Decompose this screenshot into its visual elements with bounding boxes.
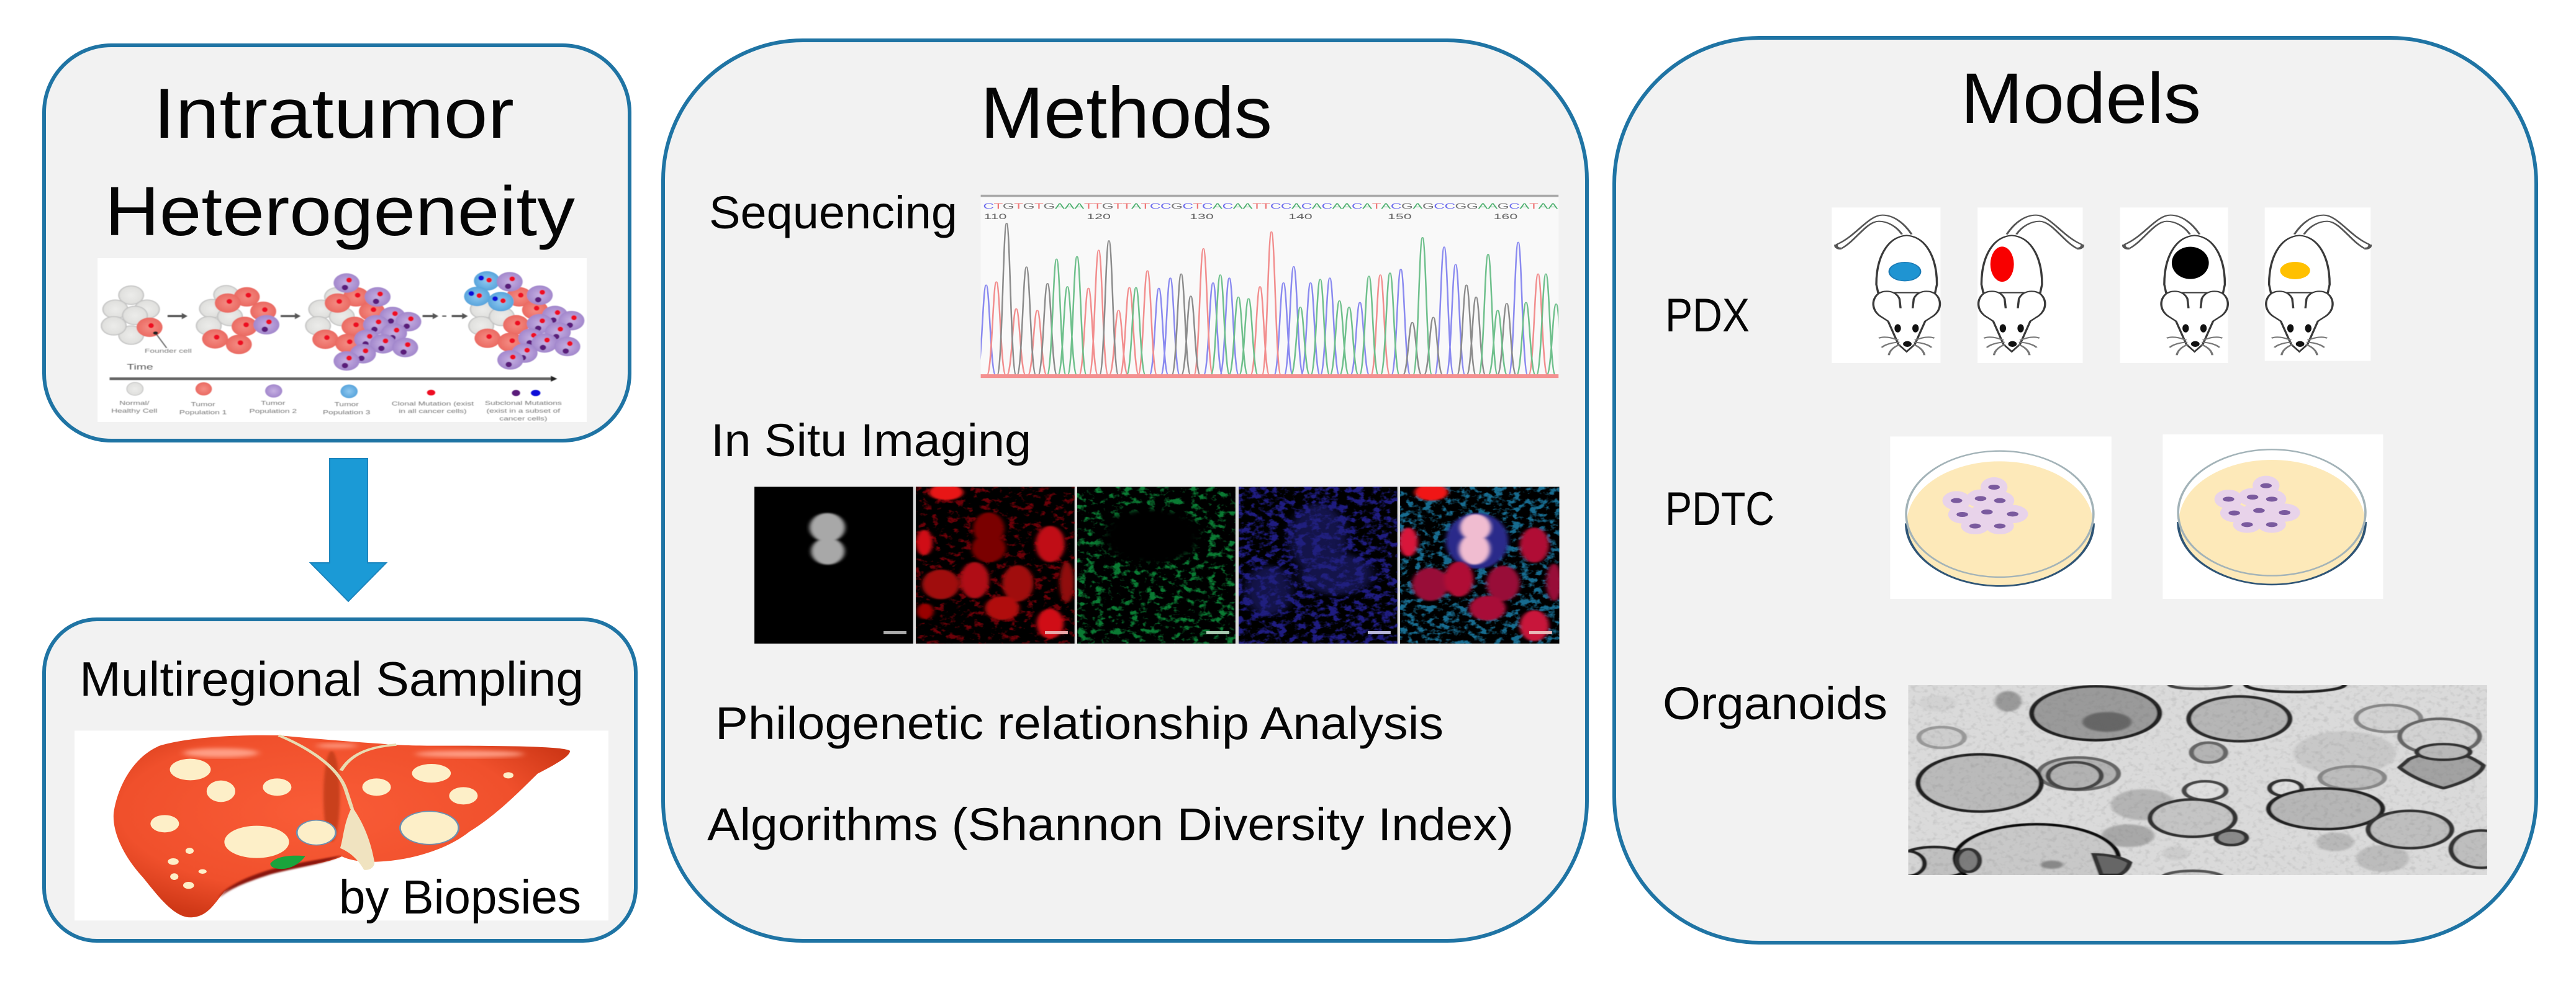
- stage 1 cells: [101, 285, 192, 354]
- label: Philogenetic relationship Analysis: Philogenetic relationship Analysis: [715, 698, 1444, 749]
- label: PDTC: PDTC: [1665, 483, 1774, 536]
- petri dish 1: [1890, 436, 2112, 599]
- petri dish 2: [2162, 434, 2383, 599]
- mouse illustrations: [1832, 207, 2370, 363]
- petri dishes: [1890, 434, 2383, 599]
- micrograph: green channel: [1077, 487, 1236, 644]
- legend: Population 3: [323, 410, 370, 416]
- arrow: down to sampling: [310, 459, 386, 601]
- stage 1 cells: Founder cell: [145, 348, 192, 354]
- mouse: blue tumor: [1832, 207, 1940, 363]
- legend: cancer cells): [499, 416, 548, 422]
- image: organoid micrograph: [1908, 685, 2487, 875]
- panel: methods: [663, 40, 1587, 941]
- diagram: clonal evolution over time: [97, 258, 587, 422]
- stage 2 cells: [196, 285, 279, 354]
- position numbers: 130: [1190, 212, 1214, 221]
- micrograph: blue channel: [1239, 487, 1398, 644]
- position numbers: 160: [1494, 212, 1517, 221]
- heading: Multiregional Sampling: Multiregional Sampling: [79, 652, 584, 706]
- liver body: [114, 735, 570, 917]
- position numbers: 110: [983, 212, 1006, 221]
- label: Sequencing: Sequencing: [709, 187, 957, 238]
- legend: Normal/: [119, 400, 150, 406]
- legend: in all cancer cells): [399, 408, 467, 415]
- mouse: yellow tumor: [2265, 207, 2370, 361]
- gallbladder: [270, 856, 305, 869]
- panel: multiregional sampling: [44, 619, 636, 941]
- arrow: stage 1 to 2: [168, 313, 188, 319]
- legend: Tumor: [191, 402, 215, 408]
- arrow: stage 3 to 4: [423, 313, 468, 319]
- heading: Methods: Methods: [980, 72, 1272, 153]
- label: Algorithms: Algorithms (Shannon Diversity Index): [707, 799, 1514, 850]
- label: In Situ Imaging: In Situ Imaging: [711, 415, 1031, 466]
- legend: Healthy Cell: [111, 408, 157, 414]
- position numbers: 140: [1288, 212, 1313, 221]
- position numbers: 120: [1087, 212, 1111, 221]
- label: PDX: PDX: [1665, 289, 1750, 342]
- sequence letters: CTGTGTGAAATTGTTATCCGCTCACAATTCCACACAACATACGAGCCGGAAGCATAA: [983, 202, 1558, 211]
- legend: Clonal Mutation (exist: [392, 401, 474, 407]
- label: by Biopsies: by Biopsies: [339, 871, 581, 924]
- image strip: fluorescence microscopy: [754, 484, 1562, 644]
- time axis: Time: [127, 362, 153, 371]
- time axis: [110, 362, 557, 382]
- micrograph: merged channels: [1399, 484, 1562, 644]
- lesions: [150, 759, 513, 889]
- position numbers: 150: [1388, 212, 1412, 221]
- heading: Intratumor Heterogeneity: Heterogeneity: [105, 173, 575, 250]
- panel: models: [1614, 38, 2536, 943]
- legend: (exist in a subset of: [487, 408, 561, 414]
- legend: Population 1: [179, 410, 227, 416]
- legend: Tumor: [335, 402, 359, 408]
- position numbers: [983, 212, 1517, 221]
- stage 3 cells: [305, 273, 422, 370]
- label: Organoids: Organoids: [1663, 678, 1887, 729]
- falciform ligament: [279, 735, 396, 870]
- heading: Intratumor Heterogeneity: [105, 74, 575, 250]
- panel: intratumor heterogeneity: [44, 45, 630, 441]
- arrow: stage 2 to 3: [281, 313, 301, 319]
- heading: Models: Models: [1961, 59, 2201, 138]
- mouse: black tumor: [2120, 207, 2228, 363]
- chart: sequencing chromatogram: [977, 195, 1566, 379]
- trace peaks: [977, 223, 1566, 375]
- mouse: red tumor: [1977, 207, 2082, 363]
- micrograph: white channel: [754, 487, 913, 644]
- stage 4 cells: [464, 271, 584, 370]
- legend: Subclonal Mutations: [485, 400, 562, 406]
- liver shading: [219, 751, 342, 898]
- heading: Intratumor Heterogeneity: Intratumor: [153, 74, 514, 153]
- legend: Population 2: [250, 408, 297, 415]
- legend: Tumor: [261, 400, 286, 406]
- legend: [111, 382, 562, 422]
- image: liver with lesions: [75, 730, 608, 920]
- micrograph: red channel: [916, 485, 1075, 644]
- liver highlights: [184, 743, 524, 758]
